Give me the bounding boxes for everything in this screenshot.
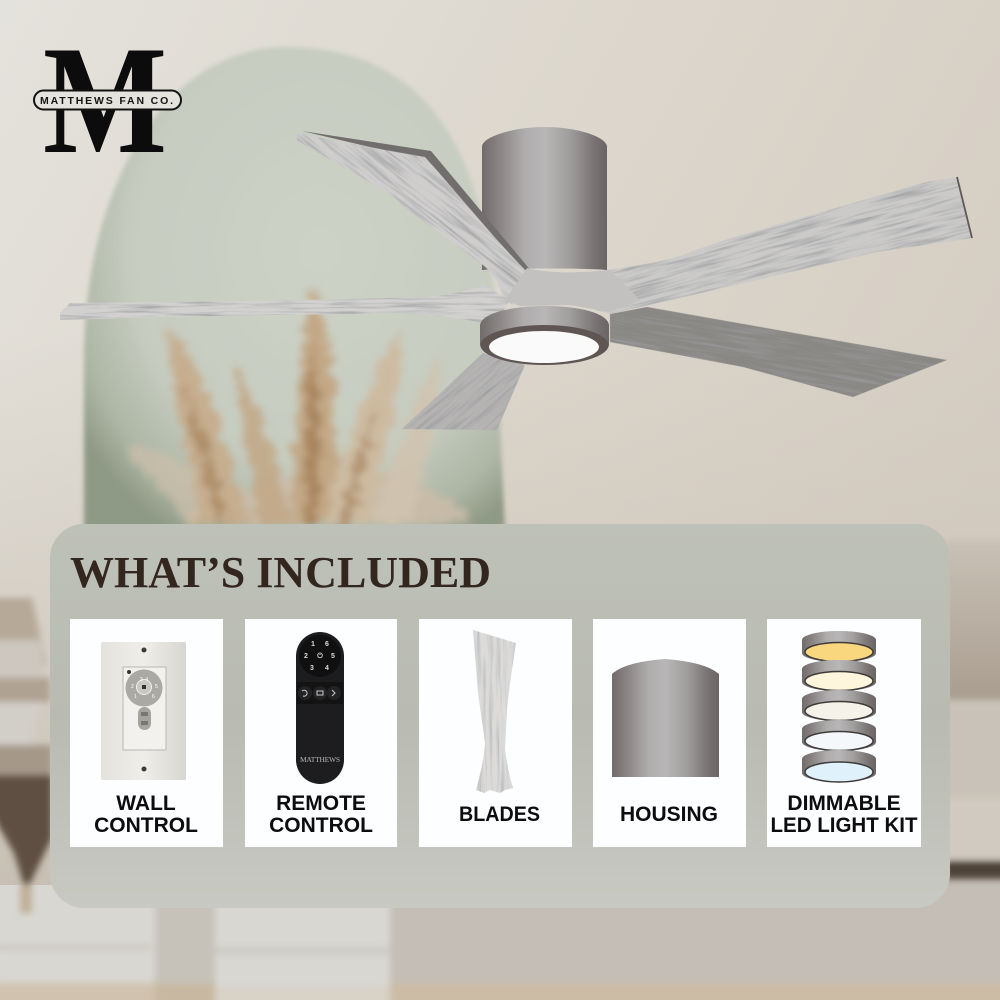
label: remote control: REMOTE [276,792,366,815]
icon: remote control [296,632,344,784]
fan blade: upper right [526,74,1000,417]
logo: Matthews Fan Co.: MATTHEWS FAN CO. [40,95,173,107]
card: remote control [245,619,397,847]
icon: remote control: ⏻ [317,652,323,660]
card: wall control [70,619,223,847]
fan LED light [480,306,609,365]
fan blade: top left [214,20,613,418]
background: pampas grass [125,285,470,525]
background: blurred sofa, right [945,540,1000,879]
icon: blade [473,630,516,793]
fan hub [505,268,640,312]
fan housing [482,127,607,270]
label: blades: BLADES [459,803,540,826]
card: blades [419,619,572,847]
label: dimmable LED light kit: DIMMABLE [787,792,901,815]
fan blade: far left [60,285,510,325]
ceiling fan [60,20,1000,491]
icon: wall control: 6 [152,694,155,700]
fan blade tip edge [957,177,972,238]
heading: WHAT’S INCLUDED [70,548,491,597]
icon: LED light stack [802,631,876,782]
label: remote control: CONTROL [269,814,373,837]
fan blade: lower right [595,249,962,455]
icon: wall control [101,642,186,780]
icon: wall control: 2 [131,684,134,690]
icon: wall control: 5 [155,684,158,690]
card: housing [593,619,746,847]
panel: what's included [50,524,950,908]
icon: remote control: 2 [304,653,308,660]
card: dimmable LED light kit [767,619,921,847]
logo: Matthews Fan Co.: M [43,14,167,186]
background: arched wall niche [84,47,505,530]
icon: remote control: MATTHEWS [300,755,340,764]
icon: remote control: 3 [310,665,314,672]
background: blurred sofa and plant, left [0,598,52,913]
label: wall control: CONTROL [94,814,198,837]
icon: remote control: 1 [311,641,315,648]
icon: remote control: 5 [331,653,335,660]
label: wall control: WALL [116,792,176,815]
icon: remote control: 6 [325,641,329,648]
icon: remote control: 4 [325,665,329,672]
label: dimmable LED light kit: LED LIGHT KIT [770,814,918,837]
fan blade: lower left [364,292,563,491]
icon: wall control: 1 [134,694,137,700]
label: housing: HOUSING [620,803,718,826]
icon: housing [612,659,719,777]
icon: wall control: 3 4 [140,677,148,683]
